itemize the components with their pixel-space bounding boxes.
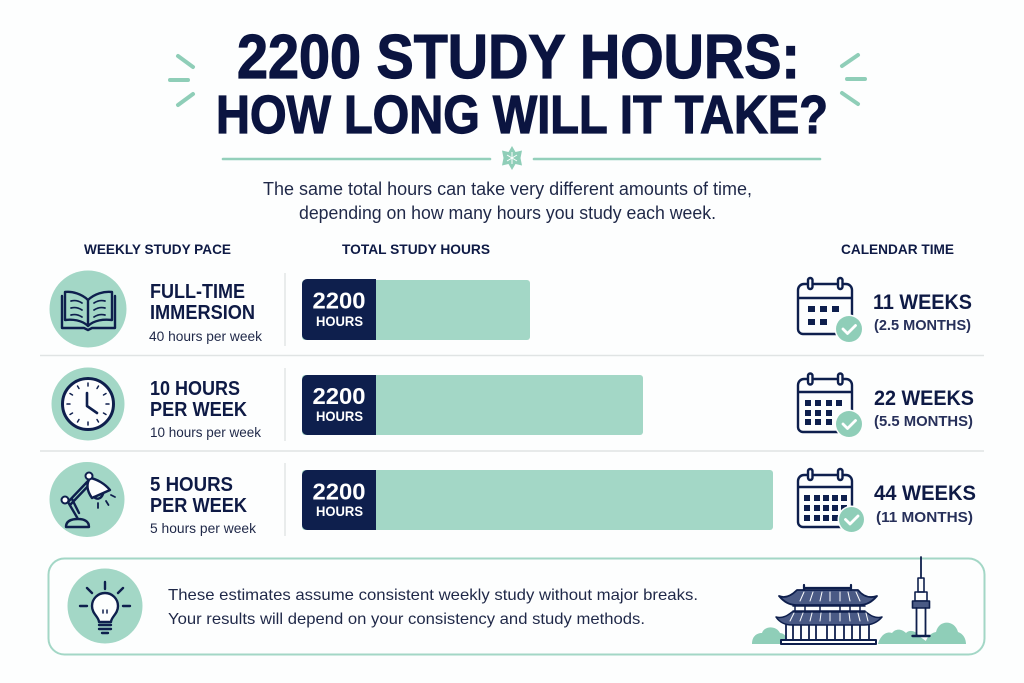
row label: 10 HOURS: [150, 378, 240, 400]
row label: IMMERSION: [150, 302, 255, 324]
illustration: tower: [912, 557, 930, 636]
icon: calendar: [798, 278, 864, 344]
row label: [150, 378, 262, 440]
calendar time: [873, 291, 972, 334]
panel: note callout: [48, 557, 984, 654]
row label: 10 hours per week: [150, 424, 262, 440]
bar: 44 weeks: [302, 470, 773, 530]
panel: row 3 five hours per week: [50, 462, 976, 537]
calendar time: 11 WEEKS: [873, 291, 972, 314]
row label: [149, 281, 263, 344]
title: HOW LONG WILL IT TAKE?: [216, 85, 828, 145]
icon: left sparkle: [170, 56, 193, 105]
calendar time: (2.5 MONTHS): [874, 317, 971, 334]
bar: 11 weeks: [302, 279, 530, 340]
column heading: total study hours: TOTAL STUDY HOURS: [342, 241, 490, 257]
icon: right sparkle: [842, 55, 865, 104]
note text: Your results will depend on your consistency and study methods.: [168, 611, 645, 628]
bar: 44 weeks: 2200: [312, 478, 366, 504]
icon: calendar: [798, 469, 866, 534]
note text: [168, 587, 698, 628]
row label: FULL-TIME: [150, 281, 245, 303]
row label: PER WEEK: [150, 495, 247, 517]
panel: row 1 full-time immersion: [50, 270, 972, 348]
icon: clock: [52, 368, 124, 440]
illustration: bushes: [752, 623, 966, 644]
bar: 22 weeks: 2200: [312, 383, 366, 409]
bar: 22 weeks: HOURS: [316, 408, 363, 424]
row label: PER WEEK: [150, 399, 247, 421]
calendar time: (11 MONTHS): [876, 509, 973, 526]
row label: 5 HOURS: [150, 474, 233, 496]
panel: row 2 ten hours per week: [52, 368, 974, 440]
subtitle: [263, 179, 752, 223]
column heading: weekly study pace: WEEKLY STUDY PACE: [84, 241, 231, 257]
bar: 11 weeks: HOURS: [316, 313, 363, 329]
calendar time: [874, 387, 974, 430]
icon: desk lamp: [50, 462, 124, 537]
icon: open book: [50, 270, 126, 348]
calendar time: 44 WEEKS: [874, 482, 976, 505]
row label: 5 hours per week: [150, 520, 257, 536]
icon: calendar: [798, 374, 864, 438]
bar: 11 weeks: 2200: [312, 288, 366, 314]
bar: 44 weeks: HOURS: [316, 503, 363, 519]
illustration: palace: [776, 585, 882, 644]
row label: 40 hours per week: [149, 328, 263, 344]
column heading: calendar time: CALENDAR TIME: [841, 241, 954, 257]
subtitle: The same total hours can take very different amounts of time,: [263, 179, 752, 199]
note text: These estimates assume consistent weekly study without major breaks.: [168, 587, 698, 604]
title: [216, 23, 828, 145]
row label: [150, 474, 257, 536]
title: 2200 STUDY HOURS:: [237, 23, 800, 92]
calendar time: 22 WEEKS: [874, 387, 974, 410]
calendar time: (5.5 MONTHS): [874, 413, 973, 430]
icon: light bulb: [68, 568, 142, 644]
title divider with star: [223, 146, 820, 170]
bar: 22 weeks: [302, 375, 643, 435]
calendar time: [874, 482, 976, 526]
subtitle: depending on how many hours you study each week.: [299, 203, 716, 223]
